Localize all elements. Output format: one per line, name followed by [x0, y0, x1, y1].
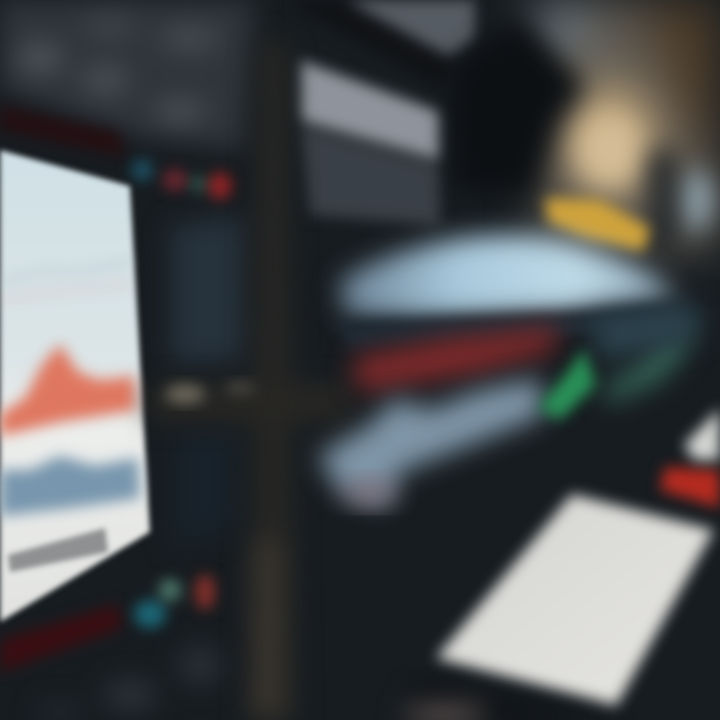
panel: upper left keyboard area — [0, 0, 255, 150]
blue grey mountains — [318, 378, 545, 505]
teal right band — [590, 302, 700, 360]
pole bracket highlights — [165, 382, 256, 404]
indicator lights bottom — [134, 574, 215, 628]
panel: left chart screen — [0, 150, 150, 622]
thin chart lines — [0, 262, 132, 300]
screen surface — [0, 150, 150, 622]
blue wave band — [0, 456, 140, 516]
light blue dome — [340, 235, 678, 318]
red block right — [660, 467, 720, 508]
red mountain chart — [0, 344, 136, 436]
panel: right monitor charts — [318, 235, 700, 505]
dark red frame below screen — [0, 604, 122, 672]
panel: centre dark monitor bezel — [170, 215, 245, 550]
yellow accent — [545, 198, 650, 252]
blurred caption text — [8, 528, 108, 572]
panel: upper right warm background — [530, 0, 720, 250]
dark band under dome — [335, 306, 680, 350]
panel: upper centre grey area — [285, 0, 475, 225]
faint green ridge — [600, 332, 690, 402]
pink reflection — [344, 479, 396, 505]
white block right — [684, 408, 720, 460]
red band — [352, 326, 560, 392]
vertical pole — [150, 40, 350, 720]
indicator lights top — [131, 159, 232, 200]
black device shape — [450, 15, 676, 250]
green peak — [538, 348, 596, 420]
dark red frame above screen — [0, 105, 125, 158]
lower left dark keys — [36, 645, 222, 720]
panel: white keyboard — [436, 494, 714, 706]
window highlight — [578, 115, 713, 230]
keyboard base shadow — [400, 682, 620, 720]
